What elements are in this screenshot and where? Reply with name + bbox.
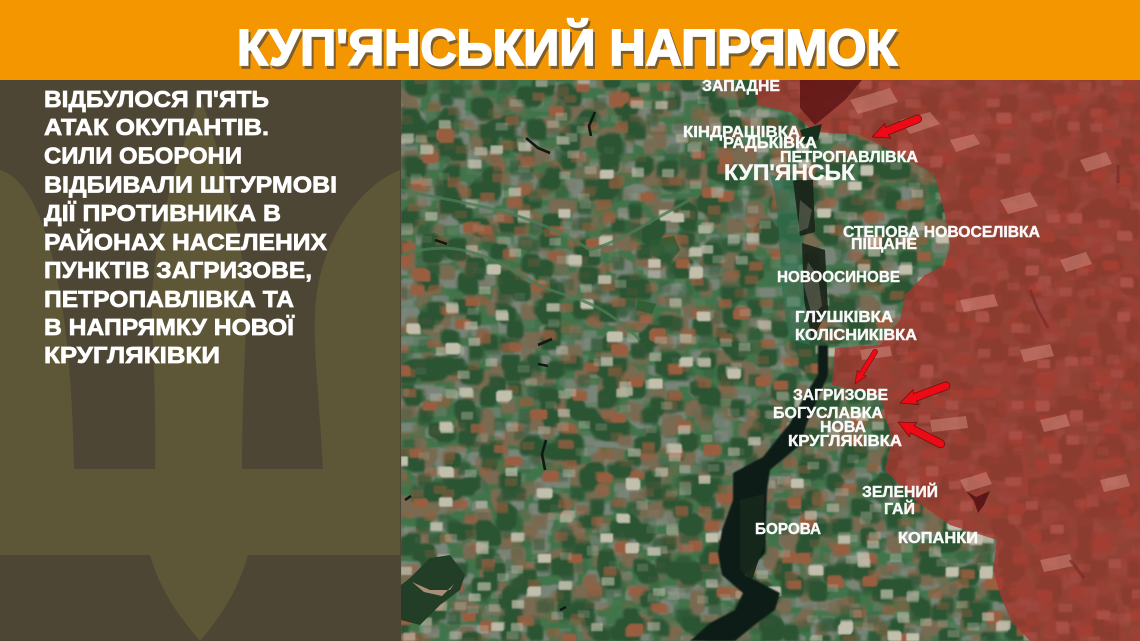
description text: КРУГЛЯКІВКИ	[44, 342, 220, 368]
title: КУП'ЯНСЬКИЙ НАПРЯМОК	[239, 21, 900, 79]
description text: ВІДБУЛОСЯ П'ЯТЬ	[44, 86, 269, 112]
map place labels: БОГУСЛАВКА	[773, 405, 883, 422]
orange header band	[0, 0, 1140, 80]
map place labels: КОПАНКИ	[898, 530, 978, 547]
map place labels: ГЛУШКІВКА	[795, 309, 893, 326]
trident emblem	[0, 95, 400, 641]
map place labels: КУП'ЯНСЬК	[724, 160, 856, 185]
description text: В НАПРЯМКУ НОВОЇ	[44, 314, 295, 340]
map place labels: ПЕТРОПАВЛІВКА	[780, 149, 918, 166]
map place labels: КРУГЛЯКІВКА	[788, 433, 902, 450]
map place labels: ЗАГРИЗОВЕ	[793, 387, 888, 404]
arrow: north towards Petropavlivka	[869, 110, 924, 144]
map place labels: КІНДРАШІВКА	[683, 124, 800, 141]
arrow: east towards Bohuslavka	[897, 377, 952, 410]
map place labels: НОВООСИНОВЕ	[777, 269, 900, 286]
map place labels: БОРОВА	[755, 521, 821, 538]
description text: СИЛИ ОБОРОНИ	[44, 142, 242, 168]
map place labels: НОВА	[820, 419, 866, 436]
red occupied territory overlay	[755, 80, 1140, 641]
description text: ПЕТРОПАВЛІВКА ТА	[44, 286, 294, 312]
description text: АТАК ОКУПАНТІВ.	[44, 114, 269, 140]
map place labels: ГАЙ	[884, 500, 915, 518]
description text: РАЙОНАХ НАСЕЛЕНИХ	[44, 228, 328, 255]
map place labels: СТЕПОВА НОВОСЕЛІВКА	[843, 224, 1040, 241]
map place labels: ЗАПАДНЕ	[702, 78, 780, 95]
satellite map	[401, 80, 1140, 641]
arrow: towards Nova Kruhliakivka	[894, 415, 948, 453]
map place labels: КОЛІСНИКІВКА	[795, 327, 917, 344]
map place labels	[683, 78, 1040, 547]
description text: ДІЇ ПРОТИВНИКА В	[44, 200, 281, 226]
left panel	[0, 80, 401, 641]
river and forest	[690, 124, 828, 641]
map place labels: ПІЩАНЕ	[851, 236, 917, 253]
title: КУП'ЯНСЬКИЙ НАПРЯМОК	[237, 18, 898, 76]
description text	[44, 86, 337, 368]
map place labels: ЗЕЛЕНИЙ	[862, 483, 938, 501]
arrow: towards Zahryzove	[850, 347, 881, 387]
description text: ПУНКТІВ ЗАГРИЗОВЕ,	[44, 257, 312, 283]
description text: ВІДБИВАЛИ ШТУРМОВІ	[44, 172, 337, 198]
map place labels: РАДЬКІВКА	[723, 135, 817, 152]
